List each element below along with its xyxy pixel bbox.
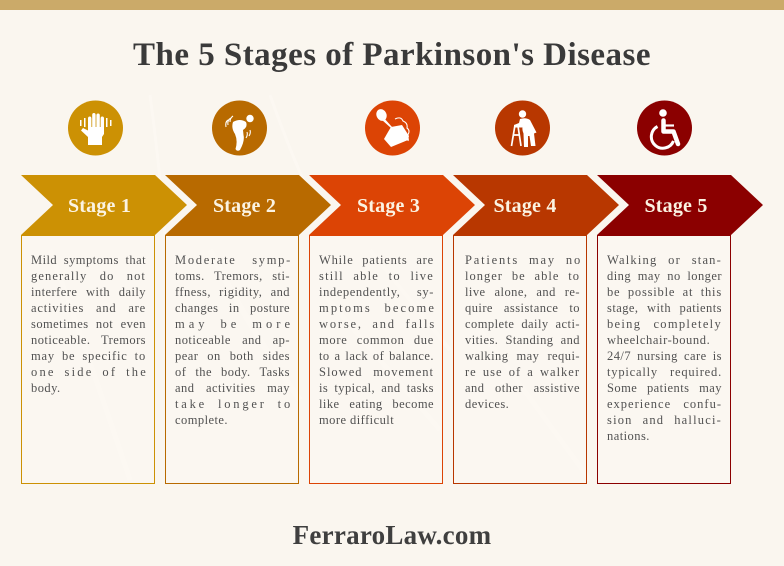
text: Stage 4 symptoms: complete daily acti- bbox=[465, 317, 580, 331]
icon: person with walker bbox=[495, 100, 550, 156]
top bar bbox=[0, 0, 784, 10]
text: Stage 4 symptoms: live alone, and re- bbox=[465, 285, 580, 299]
text: Stage 4 symptoms: devices. bbox=[465, 397, 509, 411]
text: Stage 4 symptoms: vities. Standing and bbox=[465, 333, 580, 347]
text: Stage 1 symptoms: one side of the bbox=[31, 365, 148, 379]
text: Stage 3 symptoms: is typical, and tasks bbox=[319, 381, 434, 395]
icon: stooped tremor figure bbox=[212, 100, 267, 156]
text: Stage 4 symptoms bbox=[465, 253, 582, 411]
text: Stage 3 symptoms bbox=[319, 253, 436, 427]
text: Stage 5 symptoms: be possible at this bbox=[607, 285, 722, 299]
text: Stage 2 symptoms: take longer to bbox=[175, 397, 293, 411]
text: Stage 5 symptoms: experience confu- bbox=[607, 397, 722, 411]
text: Stage 2 symptoms: complete. bbox=[175, 413, 228, 427]
text: Stage 5 symptoms: being completely bbox=[607, 317, 722, 331]
text: Stage 3 symptoms: still able to live bbox=[319, 269, 434, 283]
text: Stage 2 symptoms: pear on both sides bbox=[175, 349, 290, 363]
text: Stage 2 symptoms: and activities may bbox=[175, 381, 290, 395]
text: Stage 4 symptoms: re use of a walker bbox=[465, 365, 580, 379]
panel: Stage 5 description bbox=[597, 235, 731, 484]
text: Stage 3 symptoms: more difficult bbox=[319, 413, 394, 427]
text: Stage 1 symptoms: generally do not bbox=[31, 269, 146, 283]
arrow: Stage 5: Stage 5 bbox=[644, 195, 708, 217]
text: Stage 3 symptoms: worse, and falls bbox=[319, 317, 436, 331]
text: Stage 3 symptoms: While patients are bbox=[319, 253, 434, 267]
arrow: Stage 1: Stage 1 bbox=[68, 195, 131, 217]
text: Stage 5 symptoms: ding may no longer bbox=[607, 269, 722, 283]
text: Stage 5 symptoms: Walking or stan- bbox=[607, 253, 722, 267]
text: Stage 5 symptoms: nations. bbox=[607, 429, 650, 443]
arrow: Stage 3 bbox=[309, 175, 475, 235]
icon: wheelchair user bbox=[637, 100, 692, 156]
arrow: Stage 4: Stage 4 bbox=[493, 195, 557, 217]
text: Stage 3 symptoms: Slowed movement bbox=[319, 365, 434, 379]
text: Stage 2 symptoms: may be more bbox=[175, 317, 294, 331]
text: Stage 5 symptoms: 24/7 nursing care is bbox=[607, 349, 722, 363]
arrow: Stage 1 bbox=[21, 175, 187, 235]
text: Stage 4 symptoms: longer be able to bbox=[465, 269, 580, 283]
text: Stage 5 symptoms: wheelchair-bound. bbox=[607, 333, 710, 347]
title: The 5 Stages of Parkinson's Disease bbox=[133, 37, 651, 73]
text: Stage 5 symptoms: typically required. bbox=[607, 365, 722, 379]
text: Stage 2 symptoms: Moderate symp- bbox=[175, 253, 292, 267]
text: Stage 1 symptoms: noticeable. Tremors bbox=[31, 333, 146, 347]
text: Stage 4 symptoms: quire assistance to bbox=[465, 301, 580, 315]
text: Stage 3 symptoms: like eating become bbox=[319, 397, 434, 411]
text: Stage 4 symptoms: and other assistive bbox=[465, 381, 580, 395]
text: Stage 3 symptoms: to a lack of balance. bbox=[319, 349, 434, 363]
text: Stage 1 symptoms: may be specific to bbox=[31, 349, 146, 363]
text: Stage 1 symptoms: body. bbox=[31, 381, 61, 395]
panel: Stage 3 description bbox=[309, 235, 443, 484]
text: Stage 1 symptoms: interfere with daily bbox=[31, 285, 146, 299]
text: Stage 5 symptoms: sion and halluci- bbox=[607, 413, 722, 427]
panel: Stage 2 description bbox=[165, 235, 299, 484]
text: Stage 4 symptoms: Patients may no bbox=[465, 253, 582, 267]
text: Stage 5 symptoms: Some patients may bbox=[607, 381, 722, 395]
text: Stage 2 symptoms bbox=[175, 253, 294, 427]
text: Stage 1 symptoms: sometimes not even bbox=[31, 317, 146, 331]
arrow: Stage 4 bbox=[453, 175, 619, 235]
text: Stage 3 symptoms: more common due bbox=[319, 333, 434, 347]
arrow: Stage 5 bbox=[597, 175, 763, 235]
icon: trembling hand bbox=[68, 100, 123, 156]
arrow: Stage 2 bbox=[165, 175, 331, 235]
text: Stage 1 symptoms bbox=[31, 253, 148, 395]
panel: Stage 4 description bbox=[453, 235, 587, 484]
text: Stage 1 symptoms: Mild symptoms that bbox=[31, 253, 146, 267]
panel: Stage 1 description bbox=[21, 235, 155, 484]
icon: shaking hand with spoon bbox=[365, 100, 420, 156]
arrow: Stage 2: Stage 2 bbox=[213, 195, 276, 217]
text: Stage 5 symptoms: stage, with patients bbox=[607, 301, 722, 315]
arrow: Stage 3: Stage 3 bbox=[357, 195, 420, 217]
text: Stage 1 symptoms: activities and are bbox=[31, 301, 146, 315]
text: Stage 3 symptoms: mptoms become bbox=[319, 301, 436, 315]
text: Stage 2 symptoms: toms. Tremors, sti- bbox=[175, 269, 290, 283]
footer: website: FerraroLaw.com bbox=[293, 520, 491, 550]
text: Stage 5 symptoms bbox=[607, 253, 722, 443]
text: Stage 4 symptoms: walking may requi- bbox=[465, 349, 580, 363]
text: Stage 2 symptoms: changes in posture bbox=[175, 301, 290, 315]
text: Stage 2 symptoms: of the body. Tasks bbox=[175, 365, 290, 379]
text: Stage 2 symptoms: ffness, rigidity, and bbox=[175, 285, 290, 299]
text: Stage 2 symptoms: noticeable and ap- bbox=[175, 333, 290, 347]
text: Stage 3 symptoms: independently, sy- bbox=[319, 285, 434, 299]
